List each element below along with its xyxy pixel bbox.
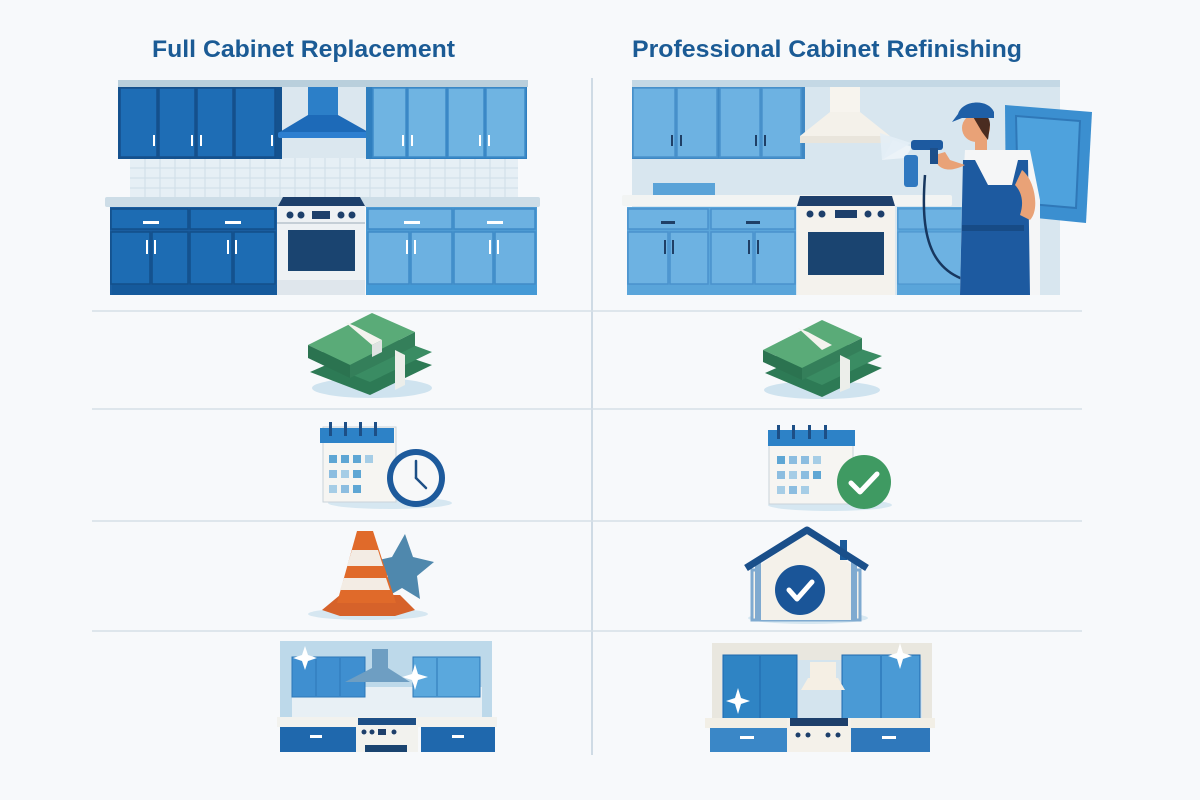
painter body: [960, 150, 1040, 295]
illustration: full replacement kitchen: [105, 80, 540, 295]
lower light: [366, 207, 537, 295]
counter: [105, 197, 540, 207]
title: Professional Cabinet Refinishing: Professional Cabinet Refinishing: [632, 36, 1022, 63]
lower dark: [110, 207, 277, 295]
hose: [924, 175, 1020, 285]
icon: traffic cone with burst (disruption): [308, 531, 434, 620]
title: Full Cabinet Replacement: Full Cabinet Replacement: [152, 36, 455, 63]
icon: calendar with clock (longer timeline): [320, 422, 452, 509]
counter: [622, 195, 952, 206]
illustration: refinishing kitchen with painter: [622, 80, 1092, 295]
upper cabinets: [632, 87, 805, 159]
stove: [278, 197, 365, 206]
illustration: new cabinets result: [277, 641, 497, 752]
panel door: [1005, 105, 1092, 223]
upper dark cabinets: [118, 87, 282, 159]
icon: money (refinishing cost): [763, 320, 882, 399]
icon: calendar with check (shorter timeline): [768, 425, 892, 511]
lower cabinets: [627, 207, 796, 295]
head: [975, 135, 987, 150]
box on counter: [653, 183, 715, 197]
stove: [797, 196, 895, 206]
hood: [830, 87, 860, 113]
spray gun: [911, 140, 943, 150]
upper light cabinets: [366, 87, 527, 159]
icon: house with check (minimal disruption): [746, 530, 868, 624]
icon: money (replacement cost): [308, 313, 432, 398]
illustration: refinished cabinets result: [705, 643, 935, 752]
hood: [308, 87, 338, 117]
